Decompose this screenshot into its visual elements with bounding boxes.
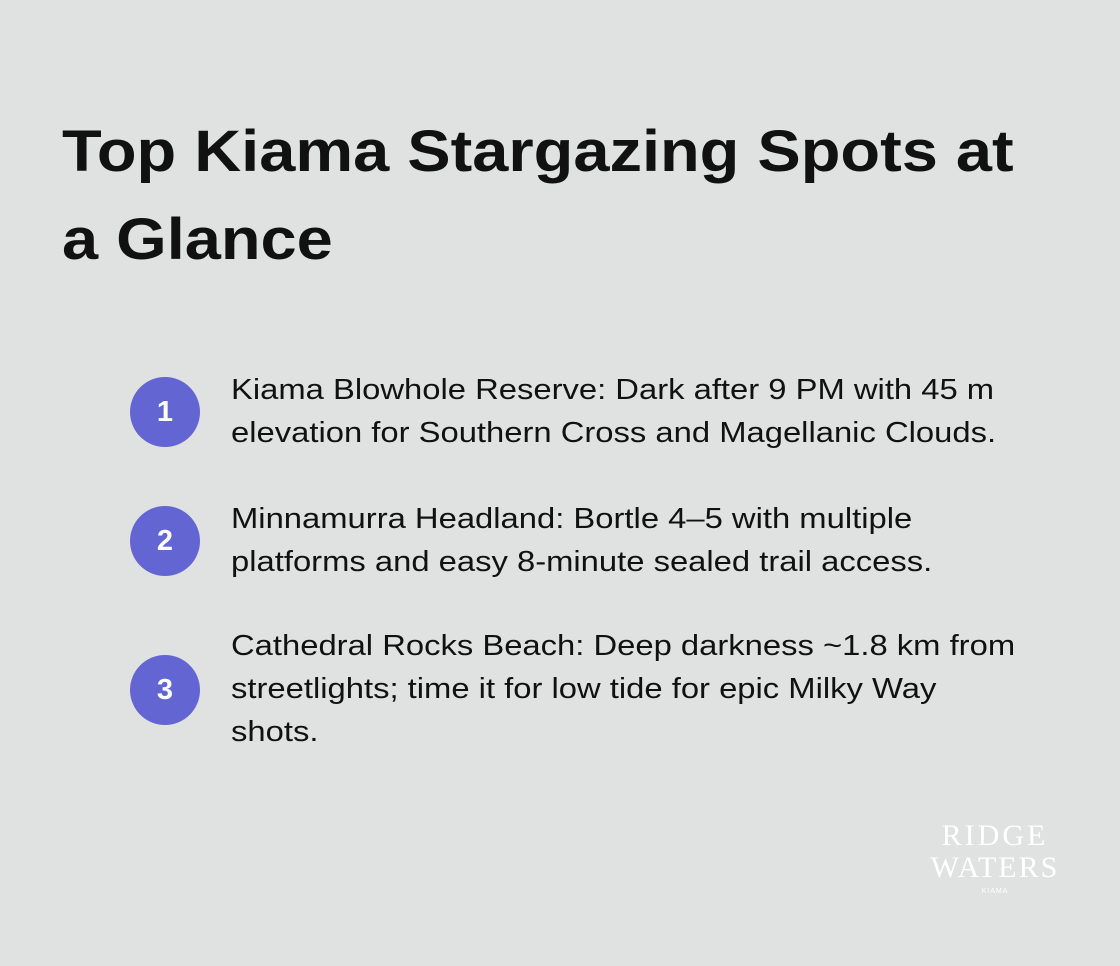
text 3: shots. [231,716,318,748]
title: Top Kiama Stargazing Spots at [62,119,1014,184]
text 1: elevation for Southern Cross and Magellanic Clouds. [231,417,996,449]
icon: number 3: 3 [157,674,173,706]
text 3: streetlights; time it for low tide for epic Milky Way [231,673,936,705]
text 2: Minnamurra Headland: Bortle 4–5 with multiple [231,503,912,535]
logo: WATERS [931,851,1059,884]
icon: number 2 [130,506,200,576]
logo: KIAMA [982,888,1008,895]
title: a Glance [62,207,333,272]
text 1: Kiama Blowhole Reserve: Dark after 9 PM with 45 m [231,374,994,406]
item 1 [130,374,996,449]
icon: number 1: 1 [157,396,173,428]
text 2: platforms and easy 8-minute sealed trail access. [231,546,932,578]
text 2 [231,503,932,578]
item 3 [130,630,1015,748]
text 1 [231,374,996,449]
icon: number 3 [130,655,200,725]
title [62,119,1014,272]
item 2 [130,503,932,578]
logo [930,819,1059,895]
text 3 [231,630,1015,748]
icon: number 1 [130,377,200,447]
text 3: Cathedral Rocks Beach: Deep darkness ~1.8 km from [231,630,1015,662]
logo: RIDGE [942,819,1048,852]
icon: number 2: 2 [157,524,173,556]
